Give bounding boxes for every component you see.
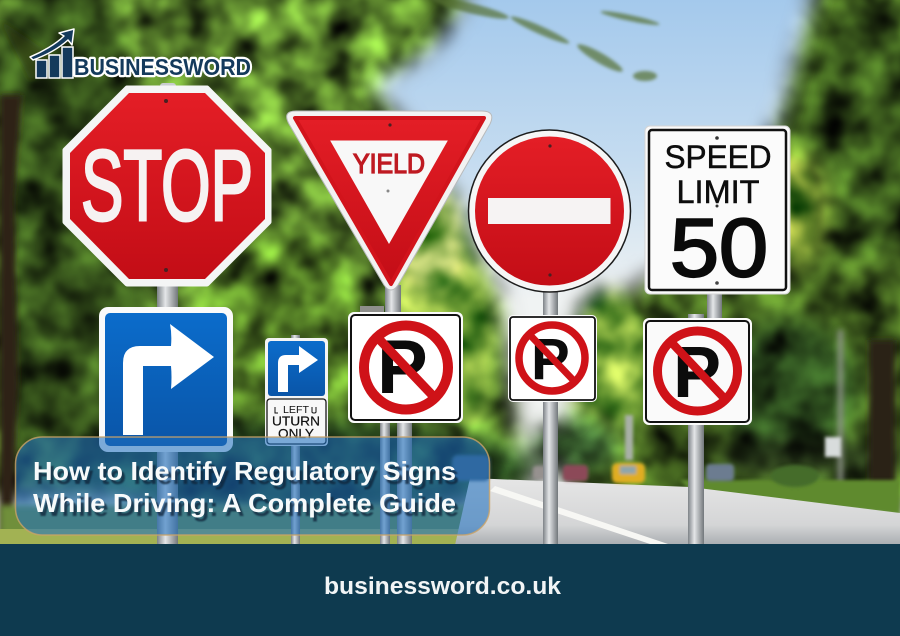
title: How to Identify Regulatory Signs [36, 460, 459, 490]
title: While Driving: A Complete Guide [33, 488, 456, 518]
sign: stop octagon: STOP [81, 130, 253, 242]
sign: no parking 2 [508, 315, 597, 402]
sign: no parking 3 [643, 318, 752, 425]
overhanging branch leaves [430, 0, 660, 81]
sign: no parking 1 [348, 306, 463, 423]
sign: small turn right with left u-turn only plate: UTURN [272, 414, 320, 428]
footer band [0, 544, 900, 636]
grass verge [0, 505, 470, 545]
left tree mass [0, 0, 530, 500]
sign: speed limit 50: SPEED [664, 139, 772, 175]
poles [157, 282, 722, 544]
sign: no parking 1: P [377, 325, 428, 410]
sign: speed limit 50: LIMIT [676, 174, 760, 210]
title [33, 456, 459, 522]
sign: small turn right with left u-turn only plate: LEFT [283, 404, 310, 416]
distant cars [452, 415, 841, 483]
sign: yield triangle [287, 111, 492, 290]
sign: small turn right with left u-turn only plate: ONLY [278, 427, 315, 441]
sign: stop octagon [65, 83, 269, 284]
sign: large turn right [99, 307, 233, 452]
sign: small turn right with left u-turn only plate [265, 338, 328, 446]
logo: Businessword: BUSINESSWORD [74, 54, 251, 80]
sign: speed limit 50 [645, 126, 790, 294]
sign: no parking 3: P [673, 333, 721, 413]
sign: yield triangle: YIELD [353, 148, 425, 179]
sign: no parking 2: P [531, 327, 570, 392]
footer url: businessword.co.uk [324, 573, 562, 600]
road [455, 478, 900, 545]
title: While Driving: A Complete Guide [36, 492, 459, 522]
logo: Businessword [30, 29, 251, 80]
sign: no entry [468, 130, 630, 292]
panel: title overlay [16, 437, 490, 535]
title: How to Identify Regulatory Signs [33, 456, 456, 486]
right tree mass [568, 0, 900, 510]
sign: speed limit 50: 50 [670, 201, 768, 294]
